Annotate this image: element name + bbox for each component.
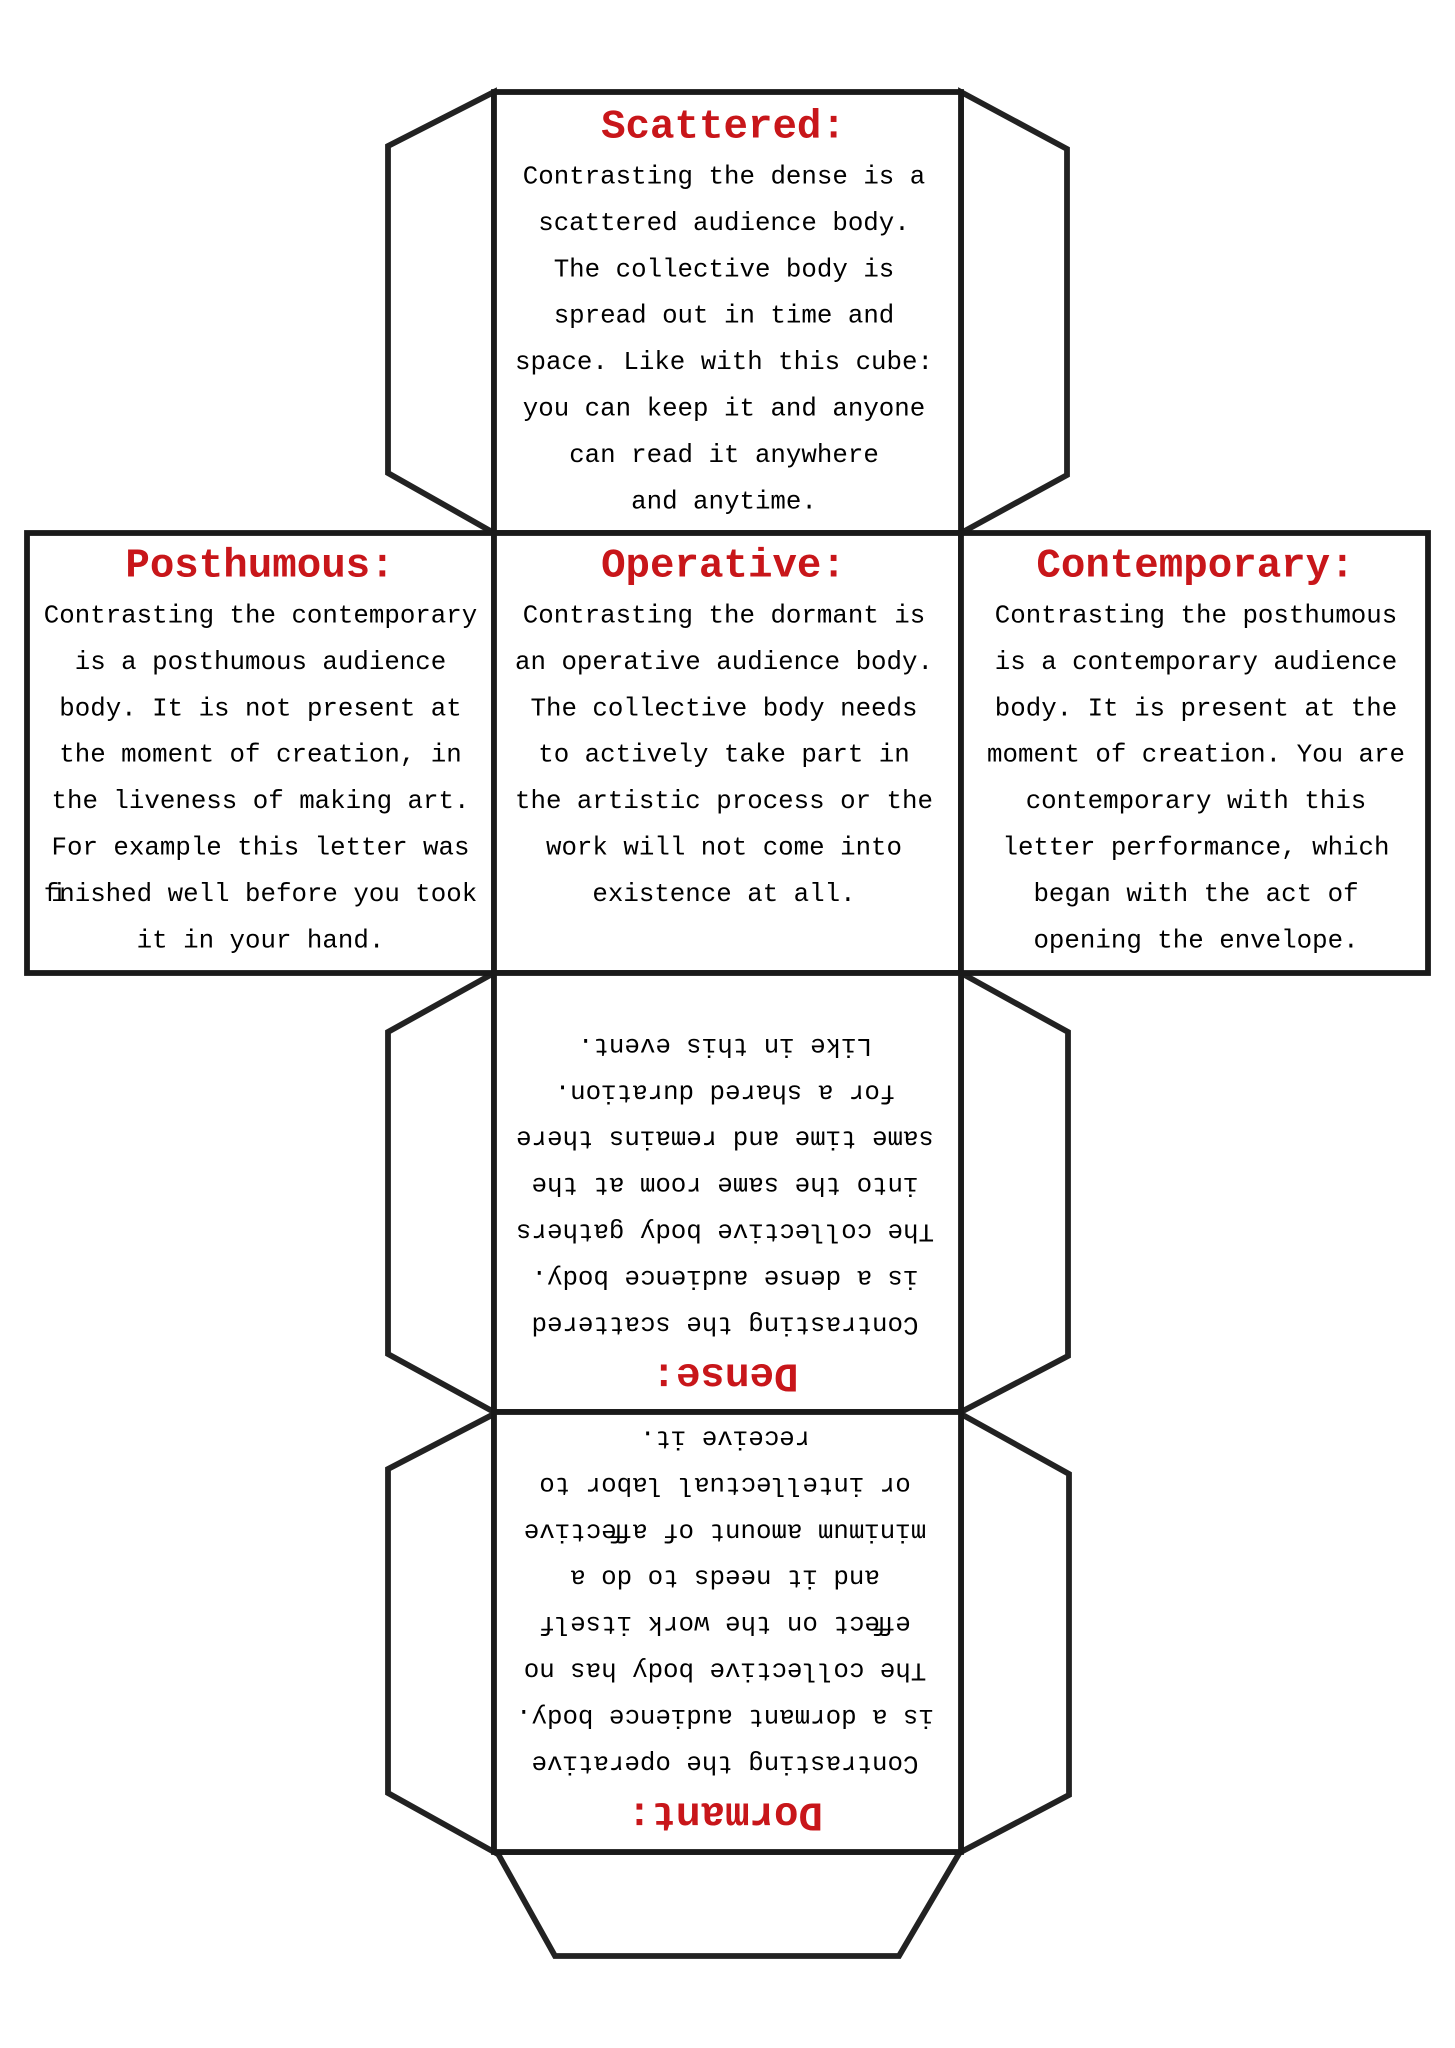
text block: Dormant body: The collective body has no [524, 1656, 926, 1684]
text block: Operative body: the artistic process or the [515, 787, 933, 816]
text block: Operative body: an operative audience body. [515, 648, 933, 677]
text block: Contemporary body [987, 602, 1405, 955]
text block: Contemporary body: body. It is present at the [995, 694, 1397, 723]
heading: Operative: Operative: [601, 543, 846, 589]
text block: Contemporary body: letter performance, which [1002, 834, 1390, 862]
text block: Operative body: work will not come into [546, 834, 902, 862]
heading: Contemporary: Contemporary: [1036, 543, 1355, 589]
text block: Dense body: same time and remains there [516, 1124, 934, 1153]
tab: top right [961, 92, 1067, 533]
text block: Posthumous body: is a posthumous audience [75, 648, 446, 677]
text block: Scattered body: you can keep it and anyone [523, 394, 925, 424]
text block: Operative body [515, 602, 933, 909]
rotated content: Dense [516, 1031, 934, 1397]
tab: middle left [388, 973, 494, 1412]
text block: Dormant body: effect on the work itself [539, 1609, 911, 1638]
heading: Dense: Dense: [652, 1351, 798, 1397]
text block: Dense body: Like in this event. [578, 1031, 872, 1060]
text block: Contemporary body: began with the act of [1033, 880, 1359, 909]
text block: Posthumous body: the liveness of making art. [52, 787, 469, 816]
text block: Dense body: The collective body gathers [516, 1216, 934, 1246]
text block: Contemporary body: Contrasting the posthumous [995, 602, 1397, 630]
text block: Scattered body: The collective body is [554, 255, 894, 284]
text block: Dense body: Contrasting the scattered [531, 1309, 919, 1338]
text block: Scattered body: scattered audience body. [538, 209, 910, 238]
heading: Scattered: Scattered: [601, 104, 846, 150]
text block: Scattered body: Contrasting the dense is a [523, 162, 925, 192]
text block: Dense body: is a dense audience body. [531, 1263, 919, 1292]
text block: Posthumous body: finished well before you took [44, 880, 477, 909]
text block: Dormant body: and it needs to do a [570, 1563, 880, 1592]
panel: Dense (upside down) [494, 973, 961, 1412]
text block: Dense body [516, 1031, 934, 1338]
text block: Scattered body: spread out in time and [554, 302, 894, 331]
text block: Dormant body [516, 1424, 934, 1777]
panel: Dormant (upside down) [494, 1412, 961, 1852]
tab: lower left [388, 1414, 494, 1852]
text block: Scattered body [515, 162, 933, 516]
text block: Dormant body: receive it. [640, 1424, 810, 1452]
tab: top left [388, 92, 494, 533]
text block: Operative body: existence at all. [592, 880, 856, 909]
text block: Scattered body: space. Like with this cube: [515, 348, 933, 377]
heading: Dormant: Dormant: [627, 1790, 823, 1836]
text block: Operative body: Contrasting the dormant is [523, 602, 925, 630]
text block: Contemporary body: contemporary with this [1026, 787, 1366, 816]
panel: Scattered [494, 92, 961, 533]
text block: Dense body: for a shared duration. [555, 1077, 895, 1106]
tab: lower right [961, 1414, 1069, 1852]
text block: Scattered body: can read it anywhere [569, 441, 879, 470]
text block: Contemporary body: moment of creation. You are [987, 741, 1405, 770]
text block: Operative body: The collective body needs [530, 694, 918, 723]
text block: Dense body: into the same room at the [531, 1170, 919, 1199]
text block: Posthumous body: body. It is not present at [59, 694, 462, 723]
text block: Scattered body: and anytime. [631, 487, 817, 516]
panel: Operative [494, 533, 961, 973]
text block: Posthumous body: it in your hand. [137, 926, 384, 955]
text block: Operative body: to actively take part in [538, 741, 910, 770]
panel: Contemporary [961, 533, 1428, 973]
panel: Posthumous [27, 533, 494, 973]
text block: Contemporary body: is a contemporary audience [995, 648, 1397, 677]
text block: Dormant body: Contrasting the operative [531, 1748, 919, 1777]
text block: Dormant body: minimum amount of affective [524, 1516, 926, 1545]
text block: Dormant body: or intellectual labor to [539, 1470, 911, 1499]
rotated content: Dormant [516, 1424, 934, 1836]
text block: Dormant body: is a dormant audience body. [516, 1702, 934, 1731]
heading: Posthumous: Posthumous: [125, 543, 395, 589]
text block: Posthumous body [44, 602, 477, 955]
text block: Contemporary body: opening the envelope. [1033, 926, 1359, 955]
tab: middle right [961, 973, 1068, 1412]
text block: Posthumous body: the moment of creation, in [59, 741, 462, 770]
text block: Posthumous body: For example this letter was [52, 834, 469, 862]
tab: bottom [497, 1852, 960, 1956]
text block: Posthumous body: Contrasting the contemporary [44, 602, 477, 630]
